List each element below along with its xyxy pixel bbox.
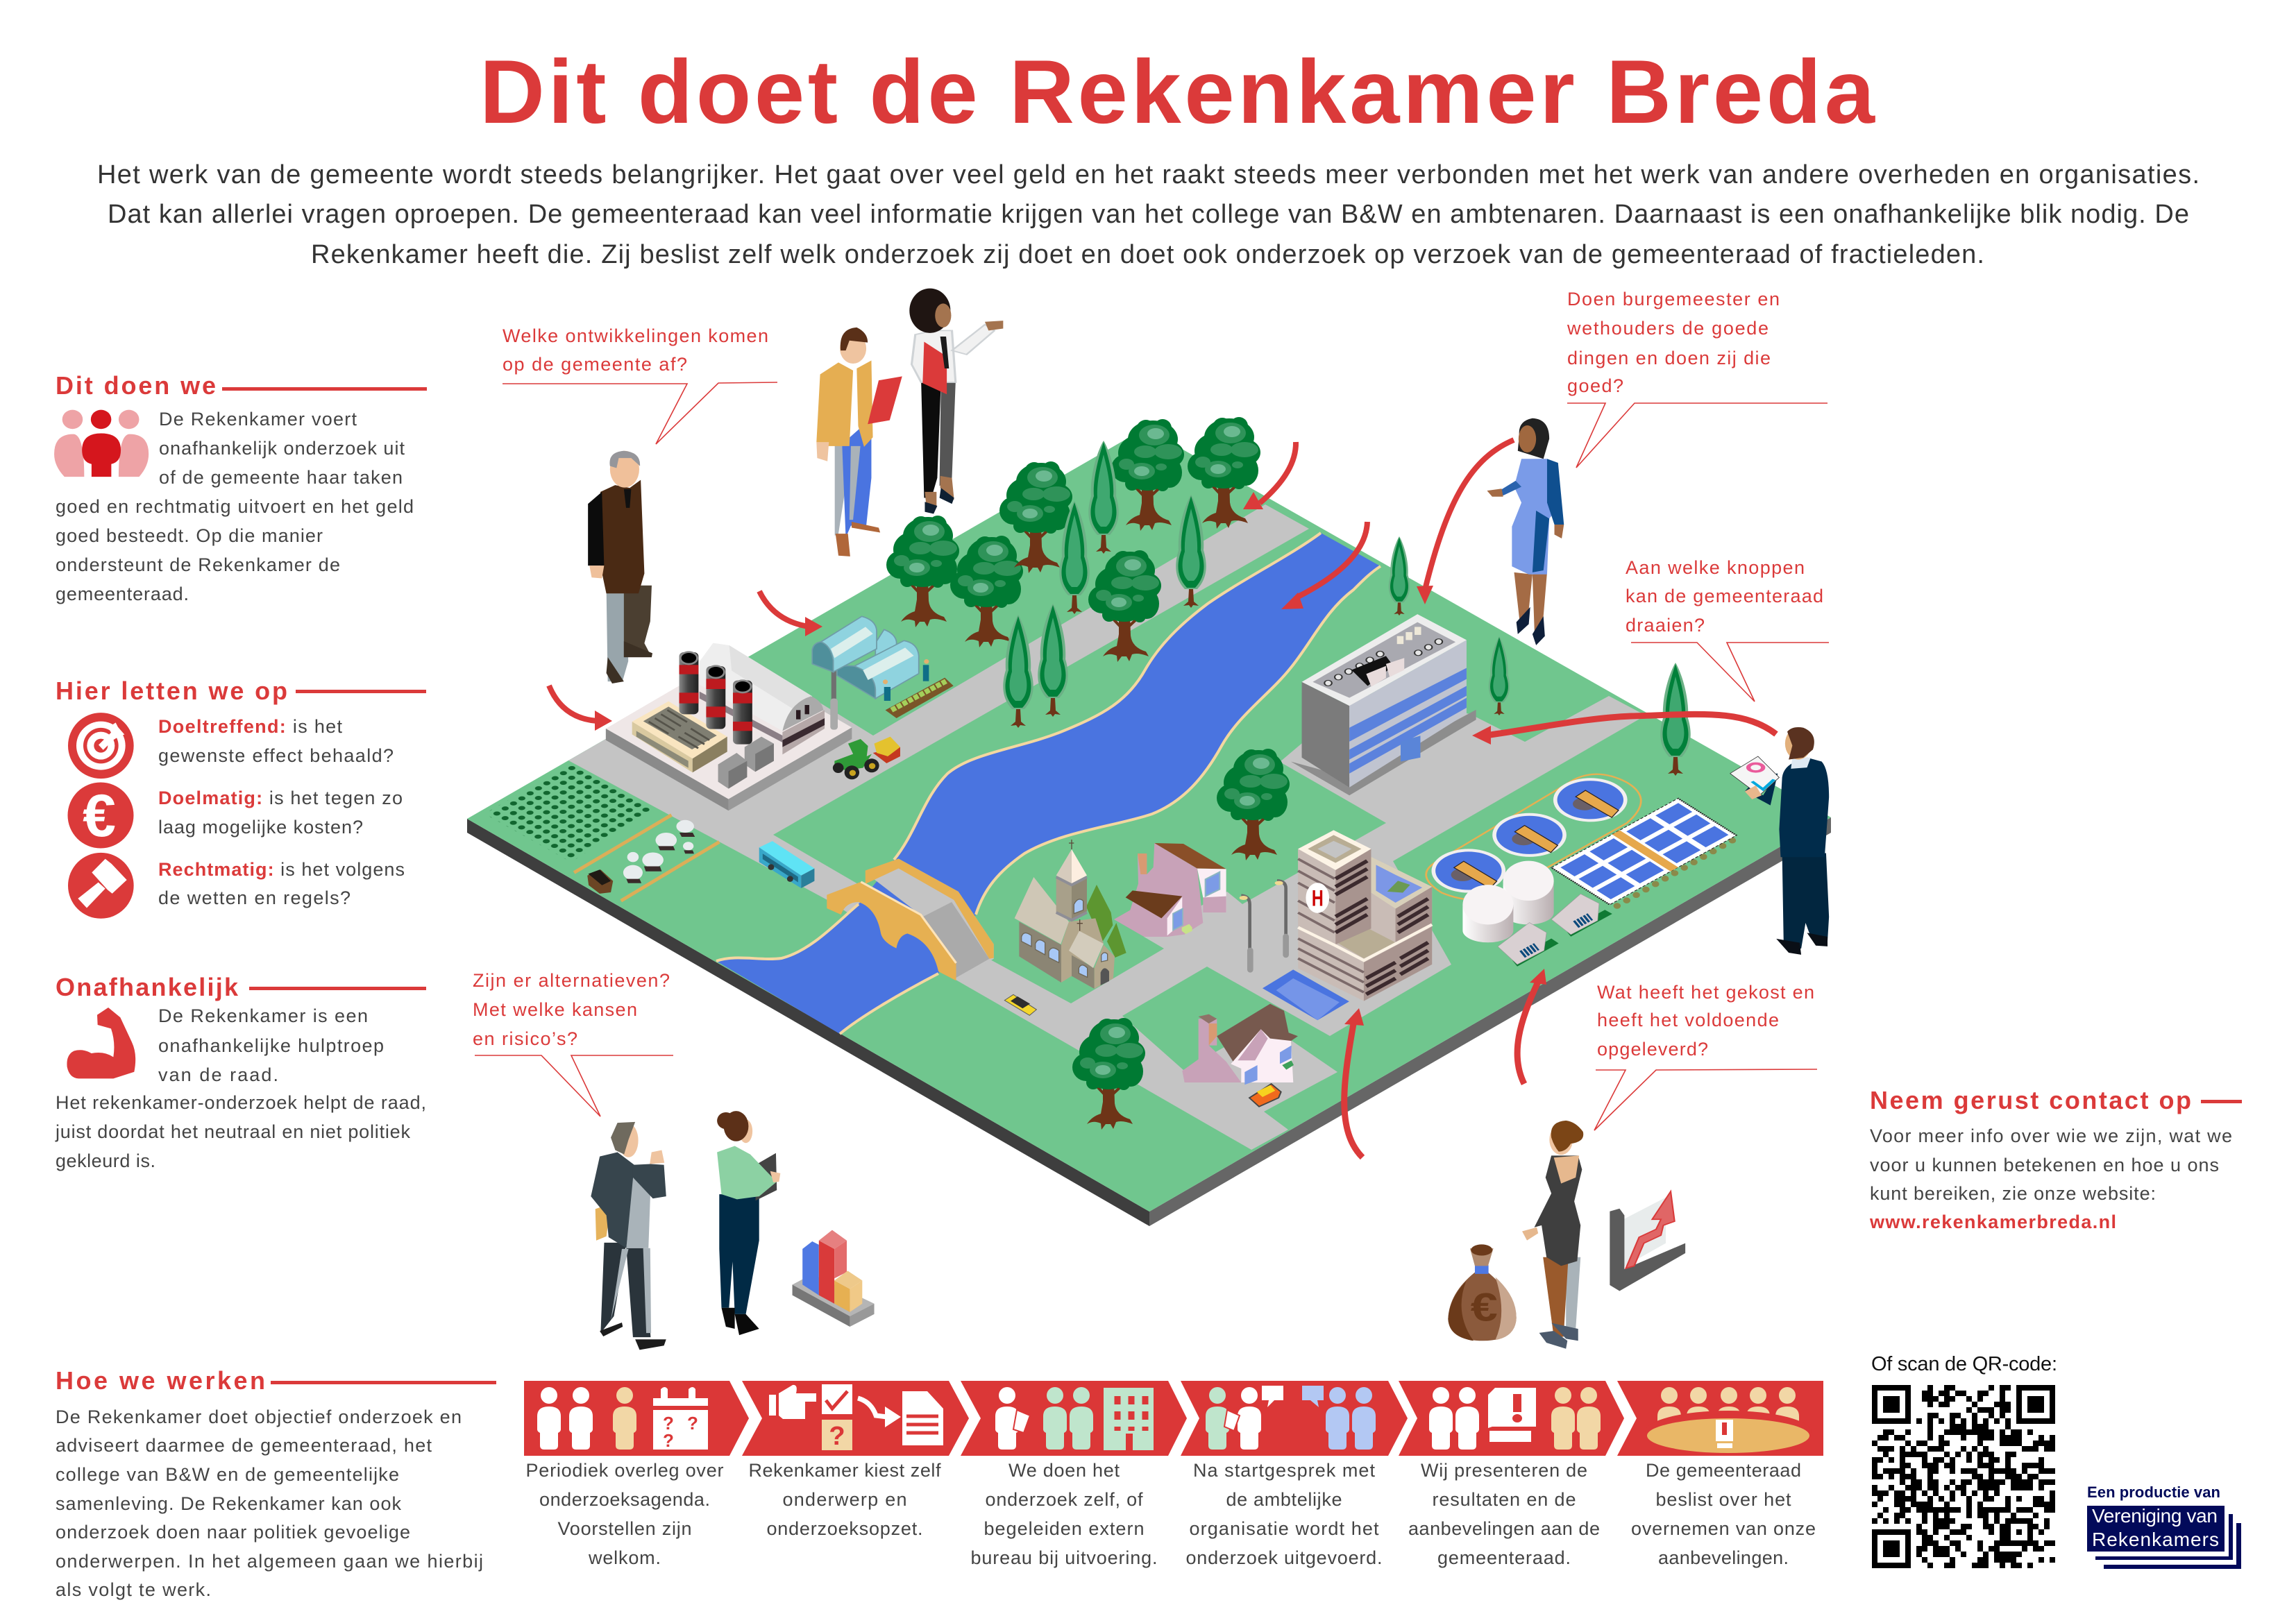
callout: Zijn er alternatieven: Zijn er alternatieven? [473, 970, 670, 991]
isometric city map [467, 417, 1831, 1226]
panel: Onafhankelijk [55, 973, 426, 1171]
panel: Hoe we werken [56, 1366, 496, 1600]
text: Dit doen we body: goed besteedt. Op die manier [56, 525, 323, 546]
arrow: to treatment plant [1517, 969, 1546, 1084]
slab sides [467, 817, 1831, 1226]
caption 5: Wij presenteren de [1421, 1460, 1587, 1481]
text: Hoe we werken body: samenleving. De Rekenkamer kan ook [56, 1493, 401, 1514]
pink house [1114, 843, 1226, 937]
callout: Zijn er alternatieven [473, 970, 673, 1116]
text: Onafhankelijk body: van de raad. [158, 1064, 278, 1085]
text: Dit doen we body: gemeenteraad. [56, 584, 189, 604]
caption 2 [748, 1460, 941, 1539]
callout: Welke ontwikkelingen [503, 325, 777, 444]
arrow: to hospital [1344, 1008, 1364, 1157]
text: Hoe we werken body: college van B&W en de gemeentelijke [56, 1464, 399, 1485]
text: Dit doen we body [56, 409, 414, 604]
arrow: from tablet man [1472, 714, 1776, 745]
arrows [549, 440, 1776, 1157]
callout: Aan welke knoppen: kan de gemeenteraad [1626, 586, 1823, 606]
logo: Vereniging van Rekenkamers: Een productie van [2087, 1484, 2220, 1501]
icon: people [54, 410, 149, 477]
caption 1: Periodiek overleg over [526, 1460, 723, 1481]
text: Hoe we werken body: onderzoek doen naar politiek gevoelige [56, 1522, 410, 1543]
icon: rising chart [1610, 1191, 1685, 1291]
house with car [1182, 1004, 1298, 1085]
intro text: Rekenkamer heeft die. Zij beslist zelf welk onderzoek zij doet en doet ook onderzoek op verzoek van de gemeenteraad of fractieleden. [311, 240, 1984, 269]
step captions [526, 1460, 1816, 1568]
caption 3: bureau bij uitvoering. [970, 1547, 1158, 1568]
person: woman in green shirt [717, 1111, 780, 1335]
river [716, 533, 1381, 1034]
logo: Vereniging van Rekenkamers: Rekenkamers [2092, 1529, 2219, 1550]
water treatment plant [1426, 774, 1737, 967]
bus [759, 841, 814, 888]
arrow: to office [1417, 440, 1514, 604]
callout: Wat heeft het gekost: Wat heeft het gekost en [1597, 982, 1814, 1003]
caption 2: onderzoeksopzet. [766, 1518, 923, 1539]
text: contact body [1869, 1125, 2232, 1232]
caption 5: aanbevelingen aan de [1408, 1518, 1600, 1539]
church [1015, 840, 1126, 989]
text: contact body: Voor meer info over wie we zijn, wat we [1870, 1125, 2232, 1146]
street lamps [1240, 881, 1286, 969]
heading: Dit doen we: Dit doen we [56, 371, 216, 400]
text: Dit doen we body: ondersteunt de Rekenkamer de [56, 554, 340, 575]
callout: Aan welke knoppen: draaien? [1626, 615, 1705, 636]
logo: Vereniging van Rekenkamers: Vereniging van [2092, 1505, 2218, 1527]
text: Onafhankelijk body: gekleurd is. [56, 1150, 155, 1171]
hospital: H [1312, 886, 1324, 911]
QR code [1872, 1385, 2055, 1568]
trees [886, 417, 1691, 1130]
text: Dit doen we body: onafhankelijk onderzoek uit [159, 438, 405, 459]
callout: Wat heeft het gekost: heeft het voldoende [1597, 1010, 1779, 1030]
intro text: Het werk van de gemeente wordt steeds belangrijker. Het gaat over veel geld en het raakt steeds meer verbonden met het werk van andere overheden en organisaties. [97, 160, 2200, 189]
text: Hoe we werken body: onderwerpen. In het algemeen gaan we hierbij [56, 1551, 483, 1572]
caption 1: onderzoeksagenda. [539, 1489, 710, 1510]
step 2: choosing subject: ? [829, 1422, 845, 1451]
text: contact body: voor u kunnen betekenen en hoe u ons [1870, 1155, 2219, 1175]
caption 4: Na startgesprek met [1193, 1460, 1375, 1481]
process chevrons [524, 1381, 1823, 1456]
caption 1 [526, 1460, 723, 1568]
intro text: Dat kan allerlei vragen oproepen. De gemeenteraad kan veel informatie krijgen van het college van B&W en ambtenaren. Daarnaast is een onafhankelijke blik nodig. De [108, 200, 2189, 229]
caption 5: resultaten en de [1433, 1489, 1576, 1510]
icon: money bag: € [1471, 1285, 1498, 1329]
tractor with hay [833, 737, 900, 779]
person: man in brown suit [588, 451, 652, 683]
text: criteria: Doeltreffend: is het [158, 716, 342, 737]
step 6: council decides [1617, 1381, 1823, 1456]
roads [568, 504, 1646, 1150]
step 3: doing research [961, 1381, 1187, 1456]
callout: Doen burgemeester: wethouders de goede [1567, 318, 1769, 339]
callout: Doen burgemeester: dingen en doen zij die [1567, 348, 1771, 368]
taxi [1004, 994, 1036, 1015]
caption 6: aanbevelingen. [1658, 1547, 1789, 1568]
office building [1291, 614, 1476, 795]
caption 1: welkom. [588, 1547, 661, 1568]
caption 3: We doen het [1008, 1460, 1120, 1481]
caption 6: De gemeenteraad [1646, 1460, 1801, 1481]
arrow: to greenhouses [759, 591, 822, 636]
caption 3: begeleiden extern [984, 1518, 1144, 1539]
crop field [484, 763, 655, 862]
text: Hoe we werken body: als volgt te werk. [56, 1579, 211, 1600]
caption 4: organisatie wordt het [1190, 1518, 1379, 1539]
step 1: periodic meeting: ? [663, 1430, 674, 1451]
step 1: periodic meeting [524, 1381, 749, 1456]
caption 1: Voorstellen zijn [558, 1518, 691, 1539]
arrow: to factory [549, 686, 612, 731]
text: contact body: kunt bereiken, zie onze website: [1870, 1183, 2156, 1204]
text: criteria: gewenste effect behaald? [158, 745, 394, 766]
text: Onafhankelijk body: De Rekenkamer is een [158, 1005, 368, 1026]
arrow: to river [1281, 522, 1367, 609]
text: contact body: www.rekenkamerbreda.nl [1869, 1212, 2116, 1232]
person: woman in black dress [1522, 1121, 1583, 1349]
icon: euro: € [83, 783, 116, 849]
panel: Dit doen we [54, 371, 427, 604]
callout: Doen burgemeester: Doen burgemeester en [1567, 289, 1780, 309]
person: man in grey suit [591, 1122, 666, 1350]
callout: Welke ontwikkelingen: Welke ontwikkelingen komen [503, 325, 768, 346]
callout: Wat heeft het gekost [1594, 982, 1817, 1130]
step 1: periodic meeting: ? [663, 1413, 674, 1434]
heading: Neem gerust contact op: Neem gerust contact op [1870, 1086, 2191, 1114]
text: Onafhankelijk body [55, 1005, 426, 1171]
caption 6: overnemen van onze [1631, 1518, 1816, 1539]
icon: gavel [68, 853, 134, 919]
person: man with tablet [1730, 727, 1829, 955]
text: Hoe we werken body: De Rekenkamer doet objectief onderzoek en [56, 1407, 462, 1427]
callout: Doen burgemeester: goed? [1567, 375, 1623, 396]
arrow: to nature [1243, 442, 1296, 509]
callout: Welke ontwikkelingen: op de gemeente af? [503, 354, 687, 375]
logo: Vereniging van Rekenkamers [2087, 1484, 2241, 1569]
caption 5 [1408, 1460, 1600, 1568]
factory [606, 643, 852, 810]
step 1: periodic meeting: ? [687, 1413, 698, 1434]
text: Dit doen we body: goed en rechtmatig uitvoert en het geld [56, 496, 414, 517]
caption 2: onderwerp en [783, 1489, 906, 1510]
text: Hoe we werken body: adviseert daarmee de gemeenteraad, het [56, 1435, 432, 1456]
icon: money bag [1448, 1244, 1517, 1341]
caption 2: Rekenkamer kiest zelf [748, 1460, 941, 1481]
hospital [1263, 830, 1432, 1020]
text: criteria: Rechtmatig: is het volgens [158, 859, 405, 880]
icon: target [68, 713, 134, 779]
bar chart [793, 1230, 875, 1327]
caption 6: beslist over het [1656, 1489, 1791, 1510]
heading: Hoe we werken: Hoe we werken [56, 1366, 265, 1395]
caption 4: de ambtelijke [1226, 1489, 1342, 1510]
orange car [1249, 1084, 1281, 1107]
heading: Hier letten we op: Hier letten we op [56, 677, 287, 705]
greenhouses [812, 616, 954, 718]
title: Dit doet de Rekenkamer Breda [480, 41, 1876, 142]
heading: Onafhankelijk: Onafhankelijk [56, 973, 239, 1001]
person: woman in blue dress [1487, 418, 1564, 645]
text: Onafhankelijk body: juist doordat het neutraal en niet politiek [55, 1121, 411, 1142]
green ground [467, 428, 1831, 1212]
panel: Hier letten we op [56, 677, 426, 919]
text: Onafhankelijk body: Het rekenkamer-onderzoek helpt de raad, [56, 1092, 426, 1113]
bridge [827, 859, 994, 980]
icon: euro [68, 783, 133, 849]
text: criteria [158, 716, 405, 908]
person: man with yellow jacket [816, 328, 902, 556]
caption 3 [970, 1460, 1158, 1568]
panel: contact [1869, 1086, 2242, 1232]
text: Onafhankelijk body: onafhankelijke hulptroep [158, 1035, 384, 1056]
callout: Wat heeft het gekost: opgeleverd? [1597, 1039, 1708, 1060]
step 2: choosing subject [742, 1381, 969, 1456]
text: Hoe we werken body [56, 1407, 483, 1600]
text: Dit doen we body: De Rekenkamer voert [159, 409, 357, 430]
caption 3: onderzoek zelf, of [986, 1489, 1143, 1510]
text: criteria: laag mogelijke kosten? [158, 817, 363, 838]
caption 4 [1185, 1460, 1383, 1568]
person: woman with red folder [909, 289, 1003, 513]
step 5: presenting results [1399, 1381, 1624, 1456]
text: criteria: de wetten en regels? [158, 887, 351, 908]
callout: Zijn er alternatieven: Met welke kansen [473, 999, 637, 1020]
intro text [97, 160, 2200, 269]
callout: Doen burgemeester [1567, 289, 1827, 468]
callout: Aan welke knoppen: Aan welke knoppen [1626, 557, 1805, 578]
text: Dit doen we body: of de gemeente haar taken [159, 467, 403, 488]
text: criteria: Doelmatig: is het tegen zo [158, 788, 403, 808]
caption 6 [1631, 1460, 1816, 1568]
callout: Zijn er alternatieven: en risico’s? [473, 1028, 577, 1049]
icon: muscle [67, 1008, 135, 1078]
callout: Aan welke knoppen [1626, 557, 1829, 702]
step 4: start meeting [1181, 1381, 1408, 1456]
QR label: Of scan de QR-code: [1871, 1353, 2057, 1375]
caption 4: onderzoek uitgevoerd. [1185, 1547, 1383, 1568]
sheep pasture [574, 815, 719, 901]
caption 5: gemeenteraad. [1437, 1547, 1571, 1568]
